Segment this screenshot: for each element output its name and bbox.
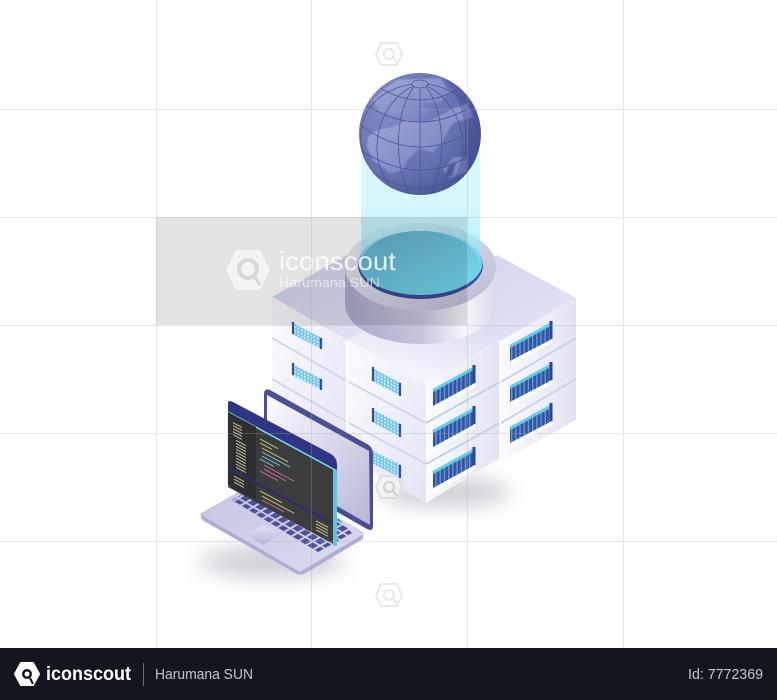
vents left faces: [292, 322, 401, 478]
laptop shadow: [200, 546, 344, 578]
laptop screen surface: [267, 395, 370, 525]
footer author: Harumana SUN: [155, 666, 253, 683]
laptop back screen: [264, 389, 373, 530]
laptop base edge: [201, 513, 363, 574]
central watermark panel: [156, 217, 467, 325]
platform top ring: [345, 223, 496, 311]
globe grid lines: [360, 80, 480, 195]
server top faces: [272, 255, 576, 385]
vents right faces: [433, 321, 552, 492]
central watermark name: iconscout: [279, 246, 397, 276]
code sidebar: [228, 412, 256, 500]
laptop base: [201, 477, 364, 571]
footer separator: [143, 663, 144, 686]
footer logo: [15, 663, 39, 685]
laptop: [201, 389, 373, 574]
cylinder platform: [345, 223, 496, 344]
footer bar: [0, 648, 777, 700]
central watermark logo: [226, 250, 270, 290]
globe continents: [367, 78, 473, 178]
dark pool rim: [358, 231, 483, 299]
trackpad: [246, 525, 280, 545]
code lines: [228, 420, 333, 539]
code panel: [228, 401, 337, 546]
keyboard: [232, 468, 352, 552]
server left block side: [272, 297, 347, 463]
globe shading: [445, 79, 480, 184]
glowing pool: [358, 231, 482, 295]
shelf dividers: [272, 338, 576, 464]
light beam: [361, 150, 480, 264]
server front block left face: [347, 340, 426, 503]
server rack stack: [272, 255, 576, 503]
server shadow: [380, 477, 510, 507]
server right block side: [500, 298, 576, 462]
footer id: Id: 7772369: [688, 666, 763, 683]
globe: [359, 73, 481, 195]
central watermark author: Harumana SUN: [279, 275, 380, 290]
platform side: [345, 267, 496, 344]
small watermark icons: [376, 43, 402, 606]
server front block right face: [426, 341, 500, 503]
footer brand: iconscout: [46, 663, 131, 685]
